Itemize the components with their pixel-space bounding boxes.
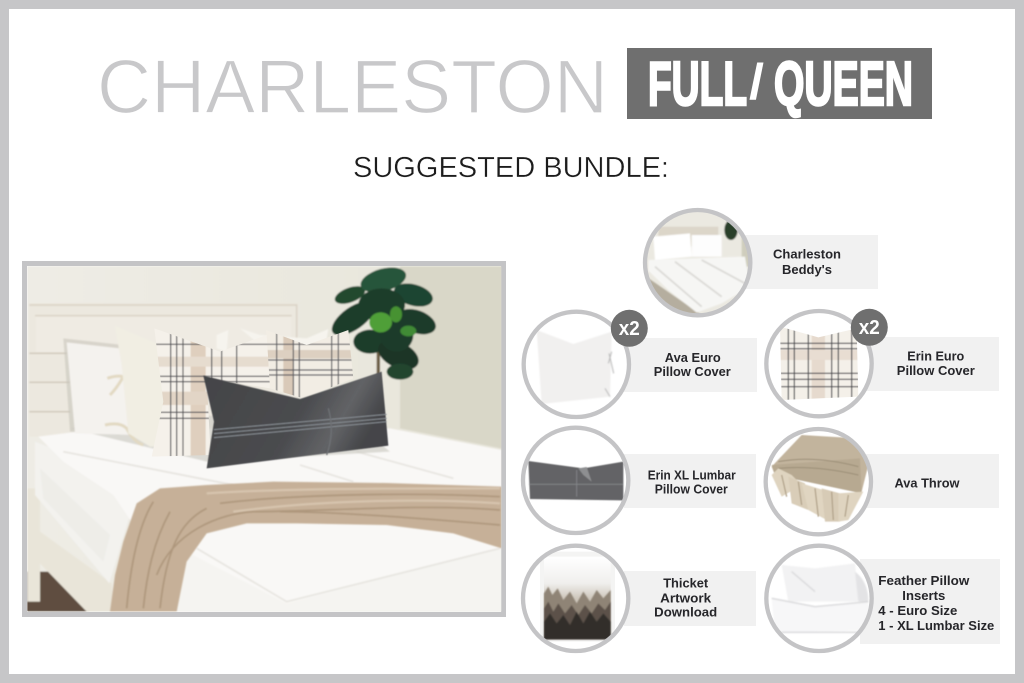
plaid pillow back [267,330,353,398]
label: Ava Euro Pillow Cover [654,350,731,379]
quantity badge x2: x2 [859,317,880,339]
plaid pillow front [150,327,272,458]
label: Thicket Artwork Download [654,576,717,620]
item: Thicket Artwork Download [523,546,756,651]
label: Charleston Beddy's [773,246,841,277]
label: Erin Euro Pillow Cover: Erin Euro [907,348,964,363]
label: Charleston Beddy's: Charleston [773,246,841,262]
label: Erin XL Lumbar Pillow Cover: Pillow Cover [655,481,728,496]
label: Erin XL Lumbar Pillow Cover: Erin XL Lumbar [648,467,736,482]
panel: bedroom photo [22,263,503,614]
label: Erin Euro Pillow Cover [897,348,975,378]
label: Feather Pillow Inserts: 4 - Euro Size [878,603,957,618]
item: Ava Throw [766,429,999,534]
base frame [27,488,115,612]
label: Erin XL Lumbar Pillow Cover [648,467,736,496]
size badge: Full/Queen: / [749,54,764,110]
label: Feather Pillow Inserts: Feather Pillow [878,573,970,588]
item: Erin XL Lumbar Pillow Cover [523,428,756,533]
thumbnail: leather lumbar pillow [523,428,628,533]
title: Charleston: CHARLESTON [97,45,608,130]
thumbnail: tan throw with tassels [766,429,871,534]
item: Feather Pillow Inserts [766,546,1000,651]
label: Erin Euro Pillow Cover: Pillow Cover [897,363,975,378]
size badge: Full/Queen: QUEEN [774,50,913,119]
pillow shadows [70,415,390,462]
thumbnail: bed [642,207,755,320]
quantity badge x2: x2 [619,318,640,340]
label: Thicket Artwork Download: Artwork [660,591,712,606]
thumbnail: forest artwork [523,546,628,651]
plant [326,263,439,380]
label: Feather Pillow Inserts [878,573,994,633]
label: Ava Throw: Ava Throw [894,476,960,491]
label: Feather Pillow Inserts: Inserts [902,588,945,603]
label: Charleston Beddy's: Beddy's [782,262,832,277]
label: Ava Euro Pillow Cover: Pillow Cover [654,364,731,379]
white tie pillow [67,342,143,445]
quantity badge x2 [851,309,888,346]
thumbnail: white pillow inserts [766,546,872,651]
size badge: Full/Queen [627,48,932,119]
label: Feather Pillow Inserts: 1 - XL Lumbar Size [878,618,994,633]
comforter top [38,428,502,605]
cream pillow [118,344,160,447]
label: Thicket Artwork Download: Download [654,605,717,620]
headboard [29,304,298,414]
tan throw blanket [110,482,502,612]
thumbnail: plaid pillow [766,311,872,416]
quantity badge x2 [611,310,648,347]
label: Ava Euro Pillow Cover: Ava Euro [665,350,721,365]
leather lumbar pillow [203,372,388,468]
item: Ava Euro Pillow Cover [524,310,757,417]
item: Erin Euro Pillow Cover [766,309,999,416]
back pillows [217,331,228,350]
floor [22,572,89,612]
label: Thicket Artwork Download: Thicket [663,576,709,591]
subtitle: suggested bundle: SUGGESTED BUNDLE: [353,152,669,184]
thumbnail: white pillow [524,312,629,417]
item: Charleston Beddy's [642,207,878,320]
mattress side [35,442,130,583]
size badge: Full/Queen: FULL [648,50,747,119]
